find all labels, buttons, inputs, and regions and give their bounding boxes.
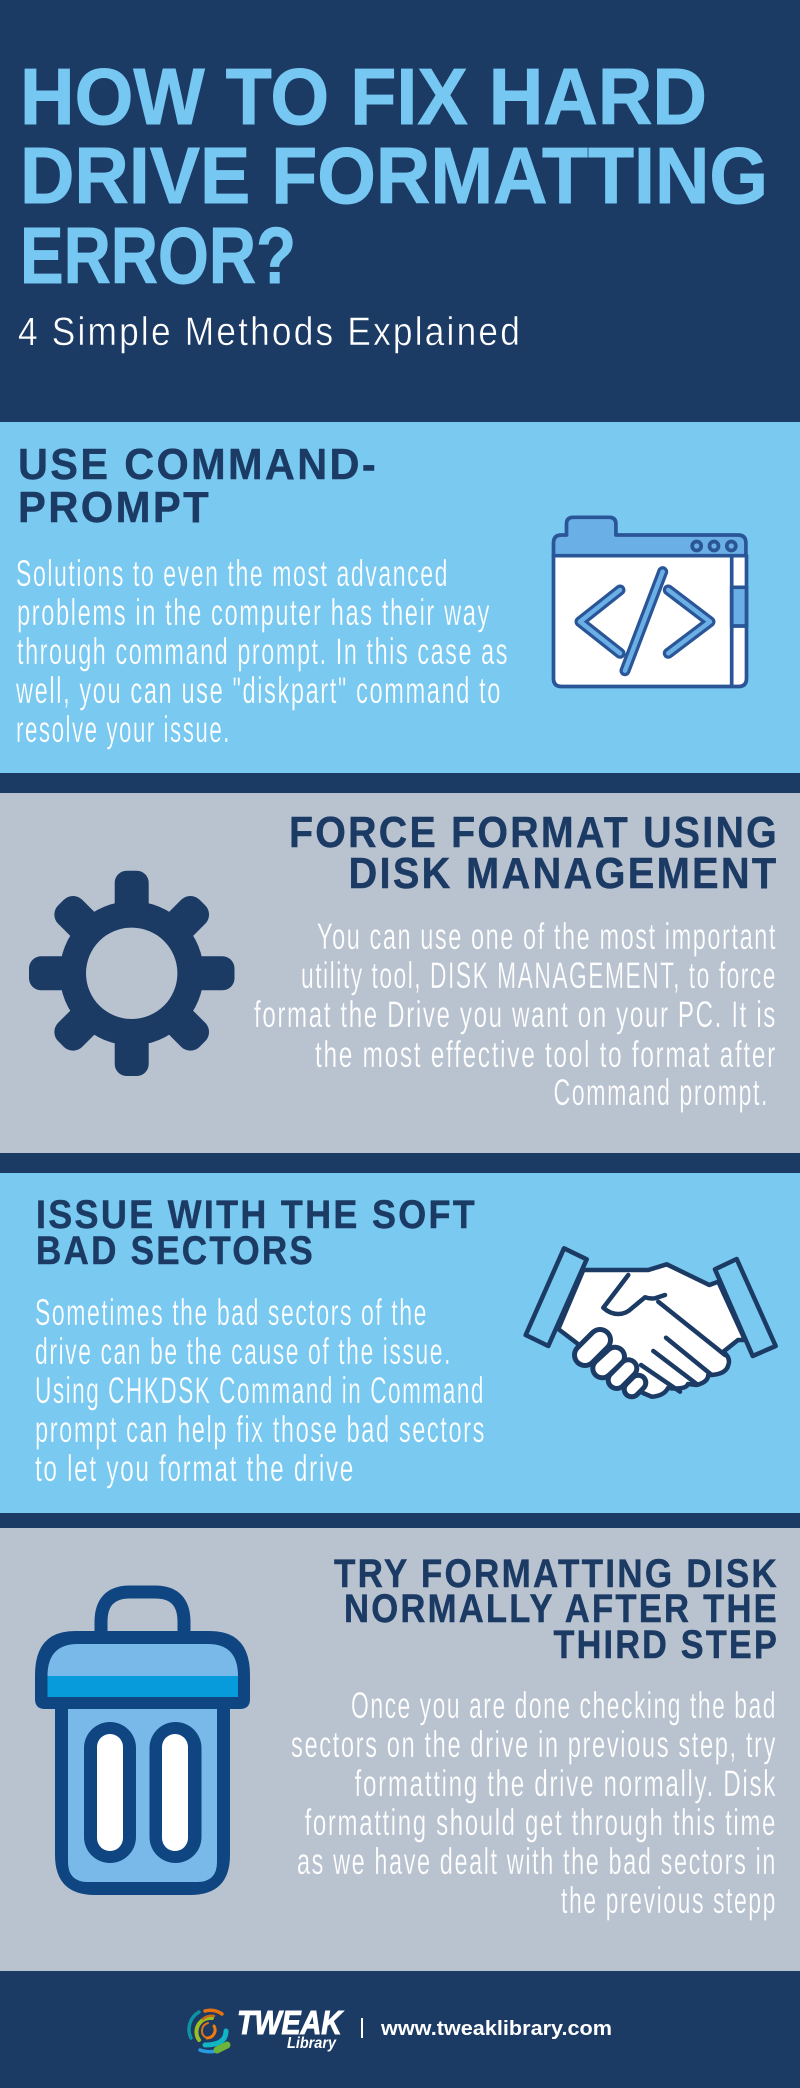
heading: use command prompt: PROMPT	[18, 483, 211, 532]
panel: use command prompt	[0, 422, 800, 773]
body text: try formatting normally	[291, 1685, 777, 1921]
heading: try formatting normally	[334, 1552, 779, 1667]
icon: handshake	[526, 1248, 776, 1397]
subtitle: 4 Simple Methods Explained	[18, 310, 522, 354]
body text: use command prompt: problems in the computer has their way	[17, 592, 491, 633]
icon: code window	[554, 517, 746, 686]
body text: soft bad sectors	[35, 1292, 486, 1489]
title: ERROR?	[20, 211, 296, 300]
body text: soft bad sectors: drive can be the cause of the issue.	[35, 1331, 452, 1372]
title: DRIVE FORMATTING	[20, 131, 768, 220]
logo wordmark	[237, 2004, 344, 2052]
body text: soft bad sectors: prompt can help fix those bad sectors	[35, 1409, 486, 1450]
panel: try formatting normally	[0, 1528, 800, 1971]
heading: soft bad sectors: BAD SECTORS	[36, 1229, 315, 1273]
website url: www.tweaklibrary.com	[380, 2018, 612, 2040]
heading: soft bad sectors: ISSUE WITH THE SOFT	[36, 1193, 477, 1237]
heading: force format	[289, 808, 779, 898]
icon: tweak library logo	[189, 2010, 227, 2052]
separator	[361, 2018, 363, 2038]
panel: soft bad sectors	[0, 1173, 800, 1513]
title: HOW TO FIX HARD	[20, 52, 707, 141]
heading: soft bad sectors	[36, 1193, 477, 1273]
body text: soft bad sectors: to let you format the drive	[35, 1448, 355, 1489]
heading: use command prompt: USE COMMAND-	[18, 440, 378, 489]
panel: header	[0, 0, 800, 422]
body text: use command prompt: resolve your issue.	[16, 709, 231, 750]
body text: soft bad sectors: Sometimes the bad sectors of the	[35, 1292, 428, 1333]
body text: use command prompt	[15, 553, 509, 750]
body text: use command prompt: well, you can use "diskpart" command to	[15, 670, 502, 711]
title	[20, 52, 768, 300]
footer	[0, 1971, 800, 2088]
logo wordmark: TWEAK	[237, 2004, 344, 2041]
body text: force format	[254, 916, 777, 1113]
body text: use command prompt: Solutions to even the most advanced	[16, 553, 449, 594]
body text: use command prompt: through command prompt. In this case as	[17, 631, 509, 672]
icon: gear	[29, 871, 234, 1076]
icon: trash can	[35, 1592, 250, 1895]
logo wordmark: Library	[287, 2035, 337, 2052]
heading: use command prompt	[18, 440, 378, 532]
body text: soft bad sectors: Using CHKDSK Command in Command	[35, 1370, 485, 1411]
panel: force format	[0, 793, 800, 1153]
